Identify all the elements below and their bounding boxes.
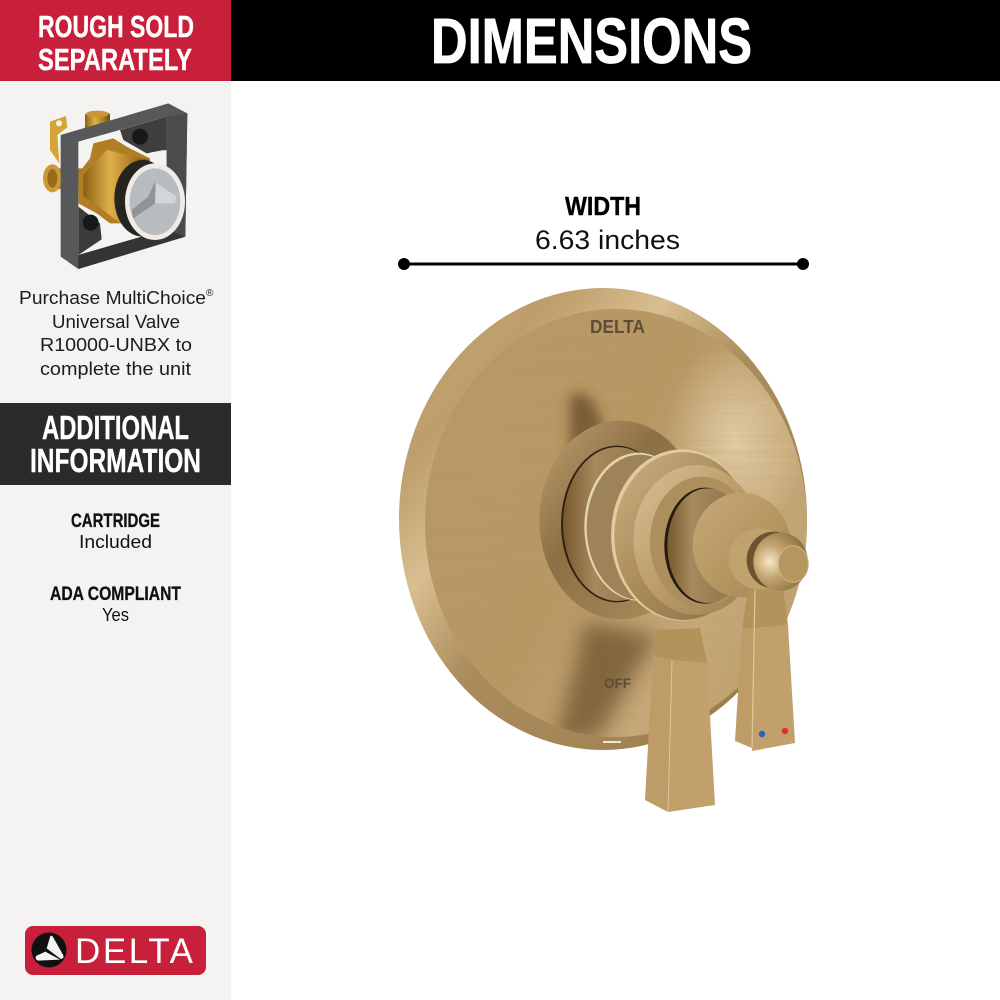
banner: rough sold separately: SEPARATELY bbox=[38, 42, 192, 77]
dimension: width: 6.63 inches bbox=[535, 225, 680, 255]
knob bbox=[728, 528, 808, 591]
frame inner faces bbox=[120, 117, 167, 153]
banner: rough sold separately bbox=[0, 0, 231, 81]
text: purchase note: Universal Valve bbox=[52, 312, 180, 332]
top pipe bbox=[85, 113, 110, 133]
banner: additional information: ADDITIONAL bbox=[42, 409, 189, 446]
text: purchase note: ® bbox=[206, 288, 214, 299]
logo: Delta: DELTA bbox=[75, 932, 194, 971]
mounting ear bbox=[50, 116, 67, 163]
spec: cartridge bbox=[71, 511, 160, 552]
left pipe bbox=[53, 168, 82, 189]
banner: dimensions title: DIMENSIONS bbox=[431, 5, 752, 77]
cap bbox=[114, 160, 171, 237]
text: purchase note: Purchase MultiChoice bbox=[19, 288, 206, 308]
banner: additional information bbox=[0, 403, 231, 485]
spec: cartridge: CARTRIDGE bbox=[71, 511, 160, 532]
indicator: hot dot bbox=[782, 728, 788, 734]
logo: Delta bbox=[25, 926, 206, 975]
engraving: off: OFF bbox=[604, 675, 631, 691]
panel: sidebar bbox=[0, 0, 231, 1000]
dimension: width: WIDTH bbox=[565, 191, 641, 221]
trim plate bbox=[399, 288, 807, 750]
frame bbox=[61, 103, 187, 269]
banner: additional information: INFORMATION bbox=[30, 442, 201, 479]
spec: ADA compliant: Yes bbox=[102, 605, 129, 625]
banner: rough sold separately: ROUGH SOLD bbox=[38, 9, 194, 44]
escutcheon and spindle bbox=[539, 421, 791, 621]
product image: shower valve trim bbox=[399, 288, 808, 812]
brass body bbox=[78, 138, 150, 223]
text: purchase note: complete the unit bbox=[40, 359, 191, 379]
lever: right bbox=[735, 586, 795, 751]
banner: dimensions title bbox=[231, 0, 1000, 81]
spec: ADA compliant: ADA COMPLIANT bbox=[50, 584, 181, 605]
dimension: width bbox=[398, 191, 809, 270]
spec: cartridge: Included bbox=[79, 532, 152, 552]
text: purchase note: R10000-UNBX to bbox=[40, 335, 192, 355]
product image: rough-in valve bbox=[43, 103, 187, 269]
text: purchase note bbox=[19, 288, 214, 379]
spec: ADA compliant bbox=[50, 584, 181, 625]
lever: left bbox=[645, 628, 715, 812]
indicator: cold dot bbox=[759, 731, 765, 737]
engraving: Delta: DELTA bbox=[590, 317, 645, 337]
